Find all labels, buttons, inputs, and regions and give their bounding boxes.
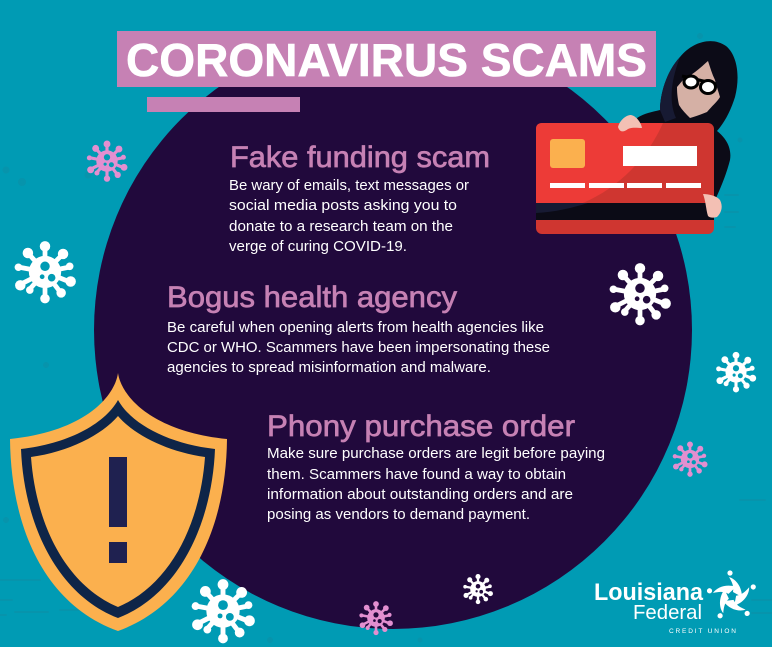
icon: virus white far right xyxy=(716,352,756,392)
icon: hooded scammer xyxy=(637,41,738,198)
text: bogus health body: CDC or WHO. Scammers have been impersonating these xyxy=(167,339,550,356)
accent bar xyxy=(147,97,300,112)
panel: phony purchase order xyxy=(267,410,605,523)
text: phony purchase body: information about outstanding orders and are xyxy=(267,486,573,503)
panel: fake funding scam xyxy=(229,141,490,255)
icon: virus pink left xyxy=(87,141,127,182)
icon: virus white bottom centre xyxy=(463,574,493,604)
icon: virus white left xyxy=(15,241,76,303)
text: phony purchase body: them. Scammers have found a way to obtain xyxy=(267,466,566,483)
title banner: CORONAVIRUS SCAMS xyxy=(126,34,647,86)
icon: credit card xyxy=(536,115,722,234)
text: bogus health body xyxy=(167,319,550,376)
icon: hands xyxy=(618,115,722,218)
panel: bogus health agency xyxy=(167,281,550,376)
heading: bogus health: Bogus health agency xyxy=(167,281,457,314)
icon: virus white right xyxy=(610,263,671,325)
logo: Louisiana Federal Credit Union xyxy=(594,570,759,635)
icon: logo star of figures xyxy=(706,570,759,623)
icon: virus pink right xyxy=(673,441,708,477)
text: bogus health body: Be careful when opening alerts from health agencies like xyxy=(167,319,544,336)
text: fake funding body: social media posts asking you to xyxy=(229,197,457,214)
text: phony purchase body xyxy=(267,445,605,523)
dark central circle xyxy=(94,31,692,629)
logo: Louisiana Federal Credit Union: Federal xyxy=(633,602,702,624)
heading: fake funding: Fake funding scam xyxy=(230,141,490,174)
icon: exclamation xyxy=(109,457,127,563)
text: phony purchase body: posing as vendors to demand payment. xyxy=(267,506,530,523)
text: fake funding body xyxy=(229,177,469,255)
text: phony purchase body: Make sure purchase orders are legit before paying xyxy=(267,445,605,462)
logo: Louisiana Federal Credit Union: Louisiana xyxy=(594,579,704,606)
icon: warning shield xyxy=(10,373,227,631)
text: fake funding body: donate to a research team on the xyxy=(229,218,453,235)
text: fake funding body: verge of curing COVID-19. xyxy=(229,238,407,255)
logo: Louisiana Federal Credit Union: CREDIT UNION xyxy=(669,628,736,635)
icon: glasses xyxy=(682,76,716,94)
icon: virus white bottom left xyxy=(192,579,255,643)
text: bogus health body: agencies to spread misinformation and malware. xyxy=(167,359,491,376)
text: fake funding body: Be wary of emails, text messages or xyxy=(229,177,469,194)
heading: phony purchase: Phony purchase order xyxy=(267,410,575,443)
icon: virus pink bottom xyxy=(359,601,393,635)
